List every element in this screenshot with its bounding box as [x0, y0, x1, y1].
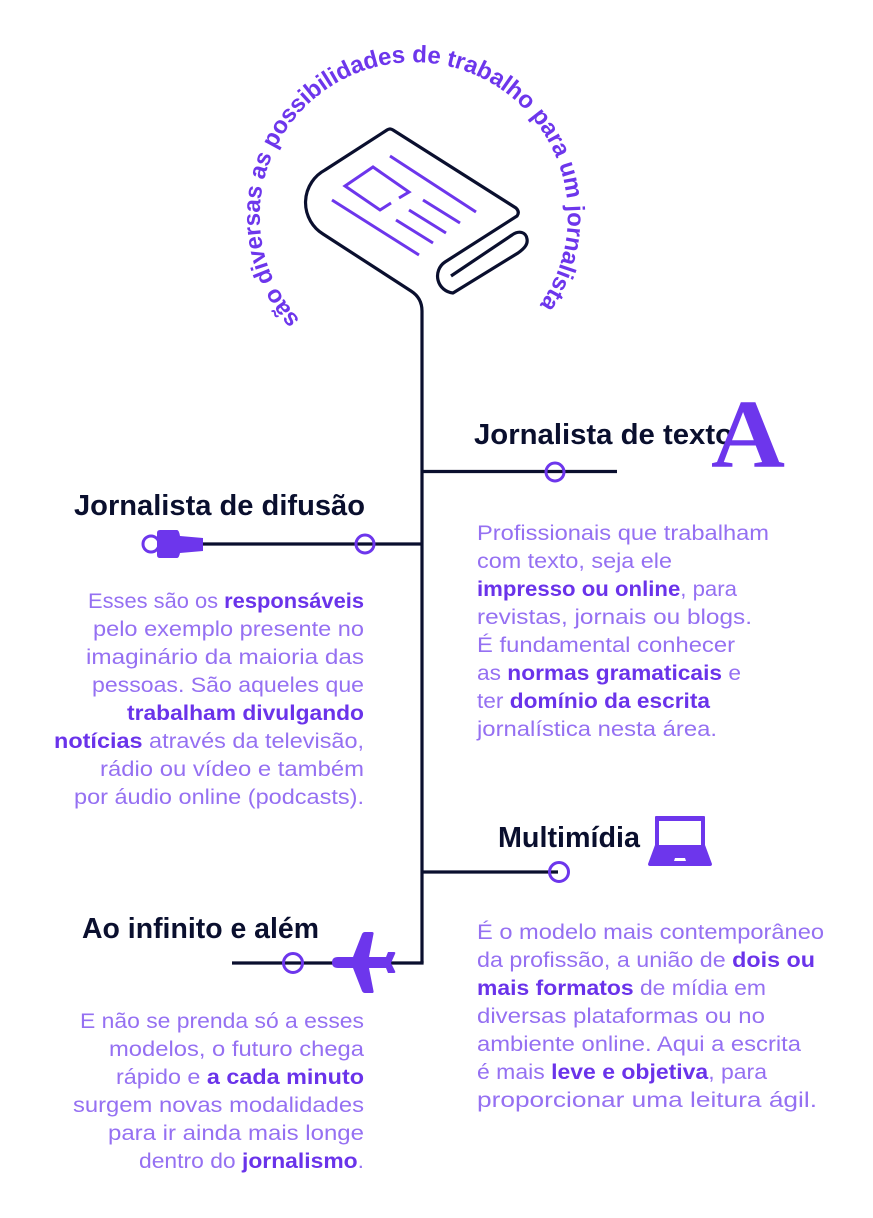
- icon: letter A: A: [711, 381, 785, 488]
- icon: laptop: [648, 816, 712, 866]
- heading: jornalista de texto: Jornalista de texto: [474, 419, 733, 451]
- text: jornalista de texto: [476, 522, 769, 741]
- title: curved text: são diversas as possibilidades de trabalho para um jornalista: [246, 45, 586, 326]
- text: ao infinito e além: para ir ainda mais longe: [108, 1122, 364, 1145]
- branch: jornalista de texto: [422, 463, 617, 481]
- text: multimídia: proporcionar uma leitura ágil.: [477, 1089, 817, 1112]
- text: jornalista de texto: com texto, seja ele: [477, 550, 672, 573]
- branch: ao infinito e além: [232, 954, 422, 972]
- text: ao infinito e além: E não se prenda só a esses: [80, 1010, 364, 1033]
- text: jornalista de difusão: [54, 590, 364, 809]
- text: multimídia: [477, 921, 824, 1112]
- text: ao infinito e além: surgem novas modalidades: [73, 1094, 364, 1117]
- text: jornalista de texto: revistas, jornais ou blogs.: [477, 606, 752, 629]
- icon: airplane: [332, 932, 395, 993]
- heading: ao infinito e além: Ao infinito e além: [82, 913, 319, 945]
- text: jornalista de difusão: Esses são os responsáveis: [88, 590, 364, 613]
- text: jornalista de difusão: pessoas. São aqueles que: [92, 674, 364, 697]
- text: jornalista de difusão: trabalham divulgando: [127, 702, 364, 725]
- text: jornalista de texto: jornalística nesta área.: [476, 718, 717, 741]
- text: ao infinito e além: modelos, o futuro chega: [109, 1038, 364, 1061]
- text: jornalista de texto: ter domínio da escrita: [477, 690, 710, 713]
- icon: newspaper with timeline stem: [306, 129, 527, 963]
- text: multimídia: É o modelo mais contemporâneo: [477, 921, 824, 944]
- icon: microphone plug: [143, 530, 203, 558]
- text: jornalista de difusão: imaginário da maioria das: [86, 646, 364, 669]
- text: jornalista de difusão: notícias através da televisão,: [54, 730, 364, 753]
- branch: jornalista de difusão: [200, 535, 422, 553]
- branch: multimídia: [422, 862, 568, 882]
- text: ao infinito e além: rápido e a cada minuto: [116, 1066, 364, 1089]
- text: multimídia: é mais leve e objetiva , para: [477, 1061, 767, 1084]
- heading: multimídia: Multimídia: [498, 822, 641, 854]
- text: jornalista de difusão: rádio ou vídeo e também: [100, 758, 364, 781]
- text: multimídia: da profissão, a união de dois ou: [477, 949, 815, 972]
- text: ao infinito e além: dentro do jornalismo .: [139, 1150, 364, 1173]
- text: ao infinito e além: [73, 1010, 364, 1173]
- text: multimídia: ambiente online. Aqui a escrita: [477, 1033, 801, 1056]
- text: multimídia: mais formatos de mídia em: [477, 977, 766, 1000]
- text: jornalista de difusão: por áudio online (podcasts).: [74, 786, 364, 809]
- text: multimídia: diversas plataformas ou no: [477, 1005, 765, 1028]
- text: jornalista de difusão: pelo exemplo presente no: [93, 618, 364, 641]
- text: jornalista de texto: as normas gramaticais e: [477, 662, 741, 685]
- text: jornalista de texto: Profissionais que trabalham: [477, 522, 769, 545]
- text: jornalista de texto: impresso ou online , para: [477, 578, 737, 601]
- text: jornalista de texto: É fundamental conhecer: [477, 634, 735, 657]
- heading: jornalista de difusão: Jornalista de difusão: [74, 490, 365, 522]
